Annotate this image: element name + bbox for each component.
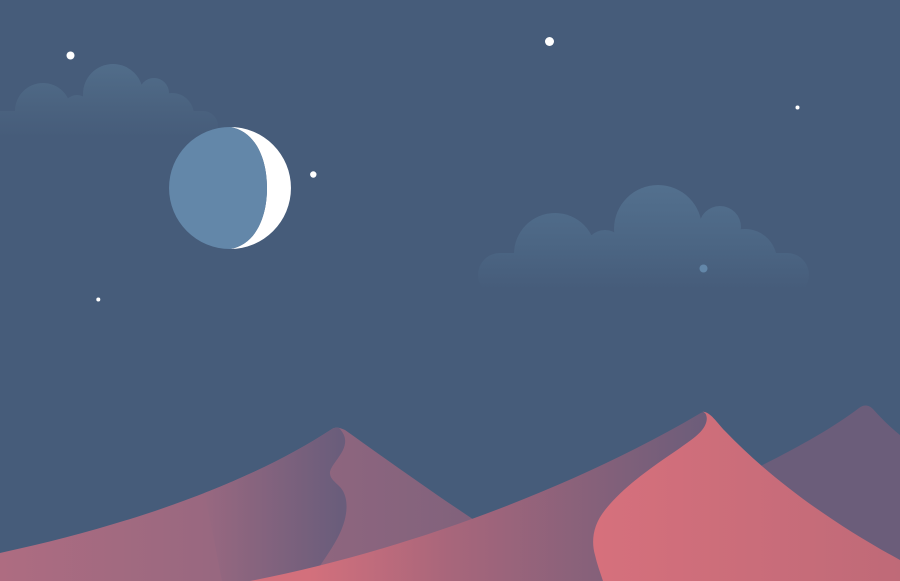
- star: dim blue: [700, 264, 708, 272]
- cloud: large right: [478, 185, 809, 297]
- dune: left: [0, 425, 500, 581]
- dune: front: [250, 412, 900, 581]
- moon: [169, 127, 291, 249]
- dune shadow: left: [204, 425, 347, 581]
- dune: front lit face: [593, 412, 900, 581]
- cloud: small left: [0, 64, 218, 142]
- stars: [66, 37, 800, 302]
- dune: far right: [740, 405, 900, 581]
